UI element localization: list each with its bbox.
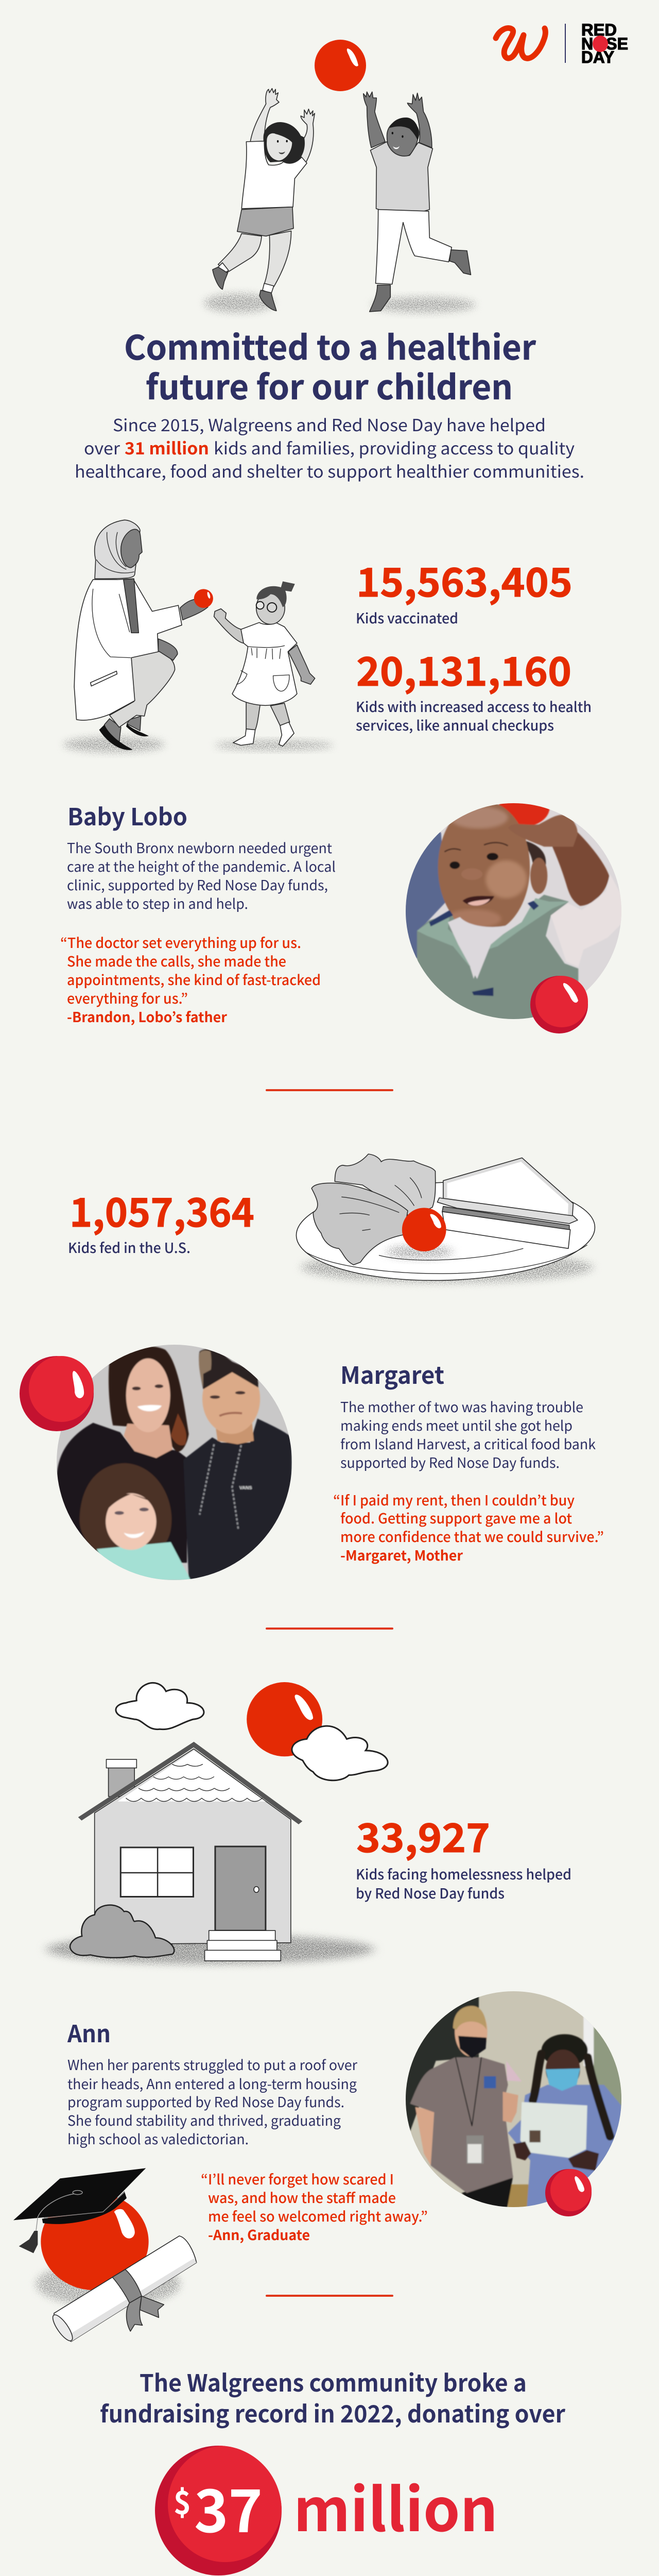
intro paragraph: Since 2015, Walgreens and Red Nose Day have helped — [113, 412, 546, 436]
icon: cloud — [292, 1726, 388, 1781]
icon: red nose sticker — [530, 976, 588, 1033]
stat: kids with increased access: services, like annual checkups — [356, 715, 554, 735]
stat: kids fed: Kids fed in the U.S. — [68, 1237, 190, 1257]
story text: Margaret — [333, 1357, 604, 1565]
divider — [266, 2295, 393, 2297]
figure: doctor — [74, 520, 208, 750]
intro paragraph: over — [84, 435, 120, 460]
body text — [340, 1396, 596, 1472]
quote — [60, 932, 321, 1026]
big number: $37 million: million — [293, 2463, 498, 2549]
stat: kids vaccinated: Kids vaccinated — [356, 607, 458, 628]
figure: girl — [213, 89, 315, 311]
closing statement — [100, 2365, 566, 2430]
figure: child — [214, 581, 315, 746]
title — [124, 321, 536, 409]
quote: Ann: was, and how the staff made — [208, 2187, 396, 2207]
closing statement: The Walgreens community broke a — [140, 2365, 527, 2399]
quote: “The doctor set everything up for us. — [60, 932, 301, 952]
body text: When her parents struggled to put a roof over — [67, 2054, 358, 2074]
illustration: house with clouds and red ball — [46, 1682, 388, 1964]
icon: Walgreens script W mark — [496, 28, 545, 58]
body text: She found stability and thrived, graduating — [67, 2110, 341, 2130]
stat: kids with increased access: Kids with increased access to health — [356, 696, 592, 716]
body text — [67, 2054, 358, 2148]
story text: Baby Lobo — [60, 799, 336, 1026]
quote: food. Getting support gave me a lot — [340, 1507, 572, 1528]
big number: $37 million — [155, 2446, 498, 2575]
body text: making ends meet until she got help — [340, 1415, 573, 1435]
body text: from Island Harvest, a critical food bank — [340, 1433, 596, 1453]
stat: kids with increased access: 20,131,160 — [356, 640, 571, 698]
photo: Baby Lobo holding a red nose — [406, 803, 621, 1019]
illustration: red nose in graduation cap with diploma — [13, 2168, 197, 2344]
icon: red ball — [315, 40, 366, 91]
quote: Ann: “I’ll never forget how scared I — [201, 2168, 394, 2189]
body text: their heads, Ann entered a long-term housing — [67, 2073, 357, 2093]
quote — [333, 1489, 604, 1565]
icon: red nose with $37 — [155, 2446, 282, 2575]
quote: more confidence that we could survive.” — [340, 1526, 604, 1546]
intro paragraph: 31 million — [125, 435, 209, 460]
body text: clinic, supported by Red Nose Day funds, — [67, 874, 328, 894]
story text: Ann — [67, 2015, 358, 2148]
photo: Margaret and her two children — [51, 1340, 299, 1587]
stat: kids facing homelessness: Kids facing homelessness helped — [356, 1863, 571, 1884]
divider — [266, 1628, 393, 1630]
divider — [266, 1089, 393, 1091]
title: Committed to a healthier — [124, 321, 536, 369]
icon: bush — [70, 1905, 174, 1958]
title: future for our children — [146, 361, 513, 409]
illustration: plate with lettuce, sandwich and red nose — [294, 1154, 597, 1285]
quote: “If I paid my rent, then I couldn’t buy — [333, 1489, 575, 1510]
logo lockup: Walgreens and Red Nose Day: RED — [581, 21, 617, 39]
figure: house — [80, 1744, 301, 1961]
stat: kids facing homelessness — [356, 1807, 571, 1903]
body text: high school as valedictorian. — [67, 2128, 249, 2148]
photo: Ann and a staff member — [402, 1989, 628, 2215]
quote: everything for us.” — [67, 988, 188, 1008]
logo lockup: Walgreens and Red Nose Day: NOSE — [581, 35, 628, 53]
icon: red nose sticker — [20, 1356, 94, 1431]
stat: kids facing homelessness: 33,927 — [356, 1807, 490, 1864]
illustration: two children jumping for a red ball — [204, 89, 476, 313]
intro paragraph: healthcare, food and shelter to support healthier communities. — [75, 459, 584, 483]
body text: The South Bronx newborn needed urgent — [67, 837, 332, 857]
body text: care at the height of the pandemic. A local — [67, 856, 336, 876]
icon: red nose — [194, 589, 213, 608]
stat: kids with increased access — [356, 640, 592, 735]
body text: supported by Red Nose Day funds. — [340, 1452, 560, 1472]
body text — [67, 837, 336, 913]
logo lockup: Walgreens and Red Nose Day: DAY — [581, 48, 614, 66]
quote: Ann: me feel so welcomed right away.” — [208, 2206, 428, 2226]
body text: program supported by Red Nose Day funds. — [67, 2091, 344, 2111]
photo: Margaret and her two children: VANS — [239, 1485, 252, 1490]
icon: red nose sticker — [545, 2169, 592, 2216]
stat: kids fed: 1,057,364 — [70, 1181, 254, 1239]
icon: cloud — [116, 1683, 204, 1730]
quote: -Margaret, Mother — [340, 1545, 463, 1565]
icon: red nose with $37: $ — [174, 2477, 191, 2523]
illustration: doctor handing red nose to child — [63, 520, 333, 752]
quote: appointments, she kind of fast-tracked — [67, 969, 321, 989]
body text: The mother of two was having trouble — [340, 1396, 583, 1416]
icon: graduation cap — [13, 2168, 146, 2253]
body text: was able to step in and help. — [67, 893, 248, 913]
icon: diploma — [49, 2236, 197, 2344]
icon: red nose — [402, 1208, 446, 1251]
quote: Ann — [201, 2168, 428, 2244]
heading: Margaret — [340, 1357, 444, 1391]
intro paragraph: kids and families, providing access to quality — [214, 435, 575, 460]
stat: kids facing homelessness: by Red Nose Day funds — [356, 1883, 505, 1903]
quote: -Brandon, Lobo’s father — [67, 1006, 227, 1026]
icon: sandwich — [437, 1158, 578, 1248]
logo lockup: Walgreens and Red Nose Day — [496, 21, 628, 66]
intro paragraph — [75, 412, 584, 483]
stat: kids vaccinated: 15,563,405 — [356, 551, 573, 608]
figure: boy — [363, 92, 471, 312]
closing statement: fundraising record in 2022, donating over — [100, 2396, 566, 2430]
icon: lettuce — [311, 1154, 436, 1265]
heading: Baby Lobo — [67, 799, 187, 833]
quote: Ann: -Ann, Graduate — [208, 2224, 310, 2244]
quote: She made the calls, she made the — [67, 951, 286, 971]
icon: red ball — [247, 1682, 322, 1756]
icon: red nose with $37: 37 — [194, 2464, 263, 2550]
heading: Ann — [67, 2015, 111, 2049]
icon: red ball — [41, 2193, 149, 2290]
